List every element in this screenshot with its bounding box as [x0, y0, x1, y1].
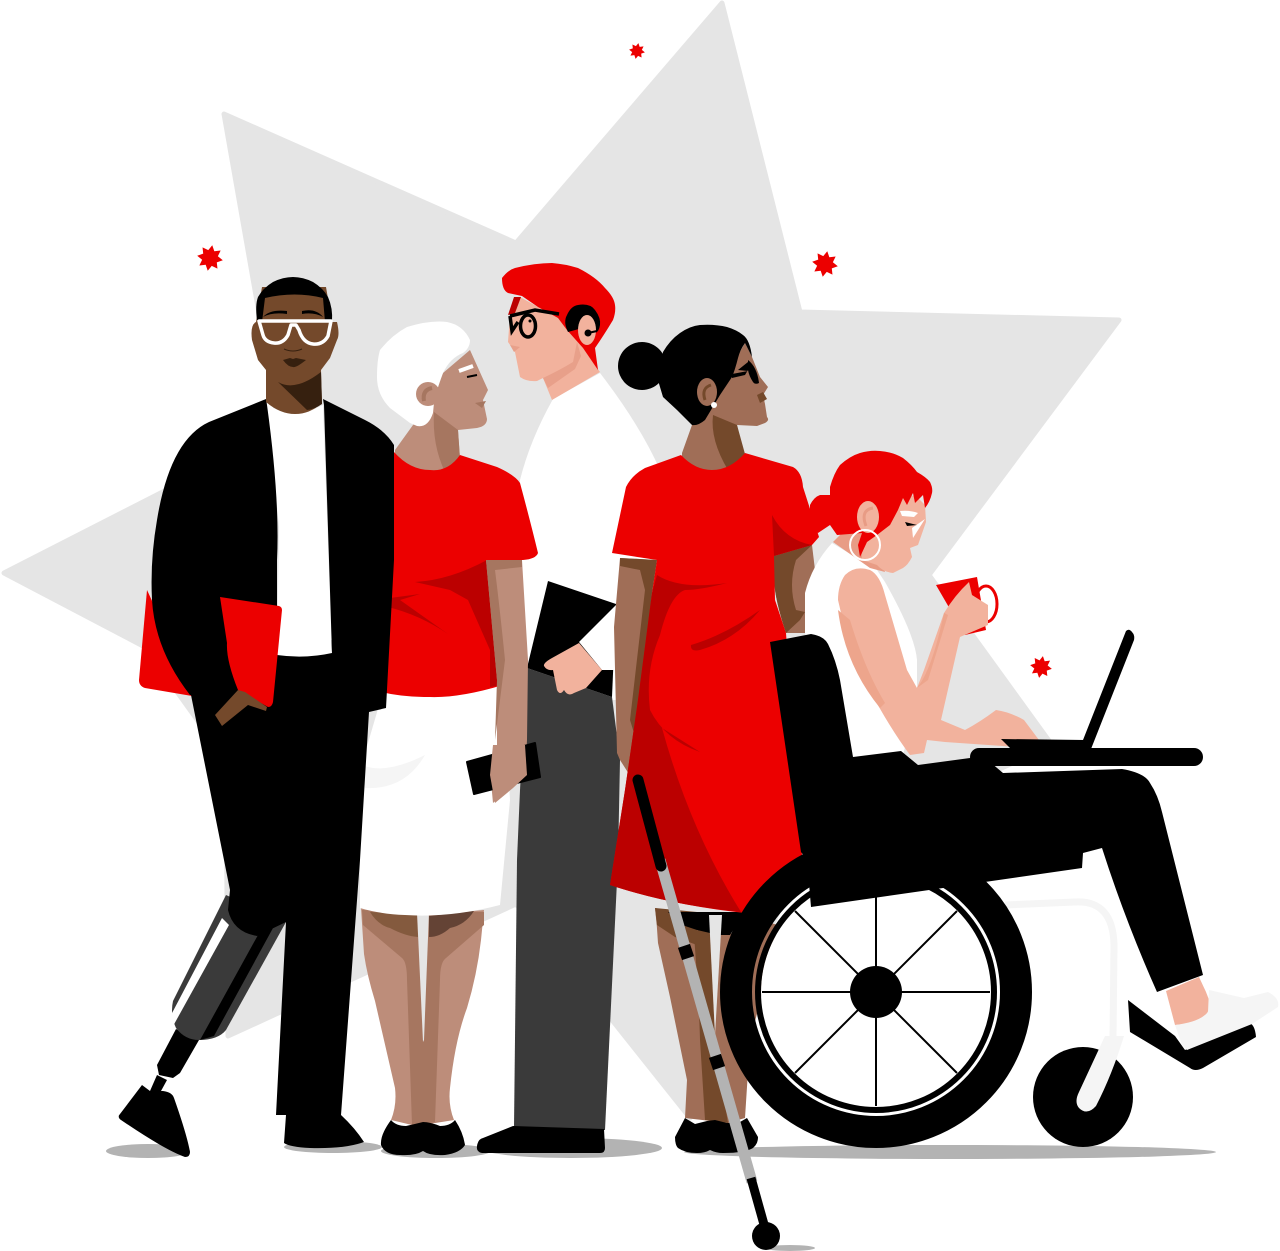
jacket right panel: [323, 399, 394, 712]
ear and hoop earring: [857, 501, 879, 533]
white glasses: [259, 321, 331, 344]
white hair: [377, 322, 470, 426]
small red stars: [197, 43, 1052, 678]
white skirt: [360, 683, 510, 916]
far arm: [774, 545, 815, 633]
black tablet: [527, 581, 616, 697]
white shoe: [1175, 990, 1278, 1050]
white sleeveless top: [805, 543, 917, 760]
neck and face: [508, 297, 600, 400]
wheelchair: [736, 630, 1278, 1147]
person: man with hearing aid and red hair: [477, 263, 660, 1153]
jacket left panel: [152, 399, 278, 700]
ground shadows: [106, 1138, 1216, 1251]
white glasses: [900, 511, 918, 517]
white frame: [1005, 902, 1114, 1040]
hair: [256, 277, 332, 322]
tray: [970, 748, 1203, 766]
hub: [850, 966, 902, 1018]
red top: [386, 452, 538, 697]
red folder front: [220, 597, 282, 707]
neck and head: [682, 343, 768, 478]
arms: [838, 568, 1039, 755]
brow and eye: [459, 366, 473, 371]
neck: [833, 530, 885, 572]
prosthetic foot: [119, 1085, 190, 1157]
hair and bun: [657, 325, 752, 425]
face: [862, 495, 926, 573]
ear and earring: [697, 378, 717, 406]
spokes: [762, 878, 990, 1106]
small front wheel: [1033, 1047, 1133, 1147]
prosthetic leg shaft: [157, 1029, 199, 1078]
legs: [655, 908, 750, 1123]
red dress: [610, 453, 819, 913]
big wheel: [736, 852, 1016, 1132]
white cane: [638, 780, 780, 1250]
ankle: [1166, 977, 1211, 1025]
white fork: [1076, 1036, 1124, 1112]
phone: [467, 743, 540, 794]
arm: [486, 560, 528, 803]
shoe: [477, 1126, 605, 1153]
prosthetic socket: [172, 895, 286, 1040]
person: woman in red dress with white cane: [610, 325, 819, 1153]
glasses: [510, 310, 559, 337]
white t-shirt: [267, 405, 332, 657]
brows and mouth: [263, 310, 323, 317]
leg seen through wheel: [745, 916, 778, 1040]
person: man with glasses, prosthetic leg and red folder: [119, 277, 394, 1157]
hand in pocket: [215, 690, 267, 726]
hand: [544, 643, 602, 694]
seat, backrest and black trousers: [770, 634, 1203, 992]
near arm: [614, 558, 657, 797]
person: woman with white hair, red top and white skirt: [360, 322, 540, 1155]
shoes: [675, 1118, 758, 1153]
shoes: [381, 1120, 465, 1155]
gap between legs: [709, 915, 722, 1035]
white shirt: [518, 373, 660, 700]
trousers: [190, 640, 369, 1148]
red mug: [936, 577, 986, 635]
neck, face, ear: [395, 350, 488, 478]
red hair: [502, 263, 615, 370]
red folder back: [139, 590, 192, 696]
dark trousers: [514, 668, 620, 1130]
hearing aid and ear: [565, 305, 600, 333]
sleeve cuff: [579, 605, 616, 670]
neck and face: [252, 287, 338, 414]
red hair: [810, 451, 932, 557]
sunglasses: [732, 360, 759, 384]
background grey starburst: [4, 3, 1119, 1118]
legs: [361, 908, 423, 1125]
laptop: [1001, 630, 1134, 749]
foot rest: [1128, 1000, 1256, 1070]
dress shading: [610, 515, 812, 912]
person: woman using a wheelchair with laptop and red mug: [805, 451, 1039, 760]
